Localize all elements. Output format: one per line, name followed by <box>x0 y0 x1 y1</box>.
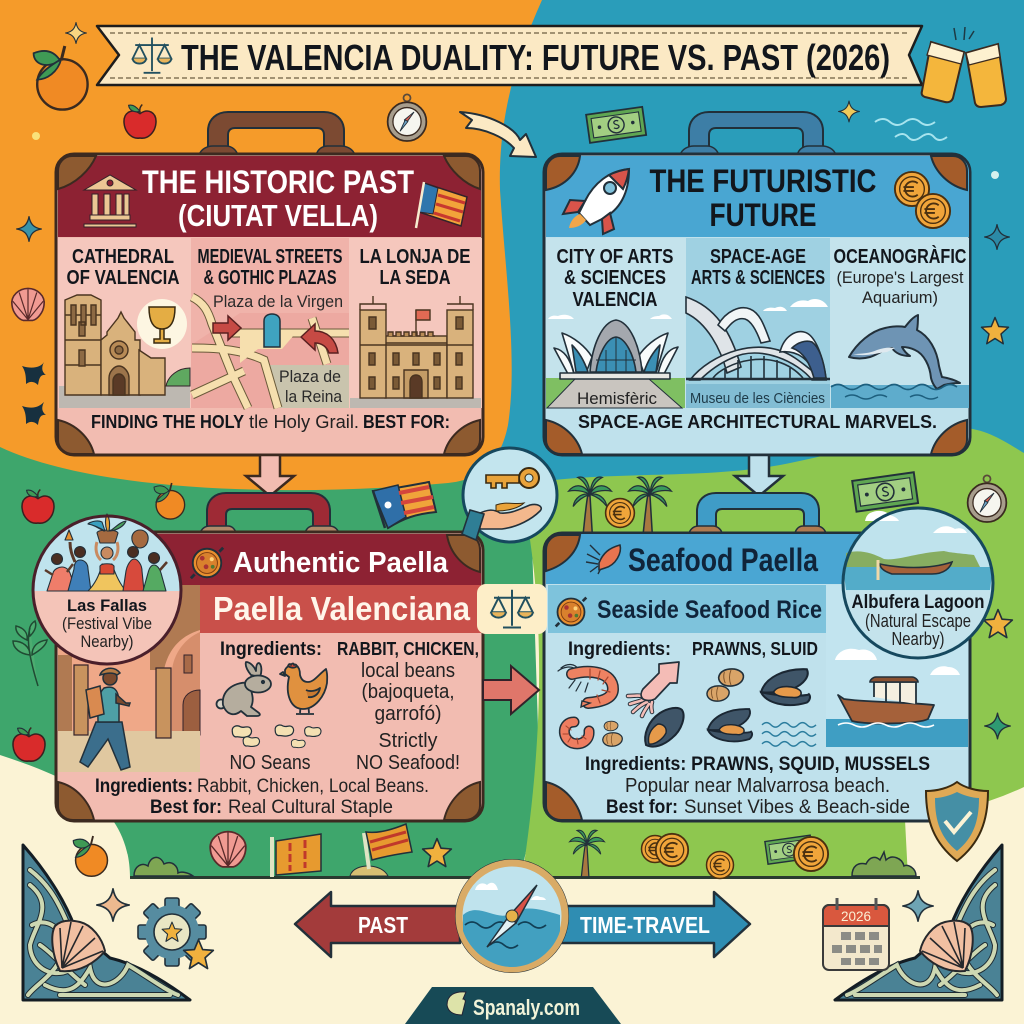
sub-heading bar <box>200 585 482 633</box>
column: medieval streets: Plaza de <box>279 367 341 386</box>
suitcase: authentic paella: Rabbit, Chicken, Local Beans. <box>197 776 429 797</box>
decorative icons: middle <box>13 472 1012 761</box>
image: wooden boat <box>826 585 968 750</box>
ingredients block: garrofó) <box>374 703 442 725</box>
icon: Valencian flag <box>373 482 436 528</box>
decorative icons: lower strip <box>73 782 988 878</box>
ingredients block: RABBIT, CHICKEN, <box>337 639 479 659</box>
decorative icons: upper right <box>586 27 1009 344</box>
column: space-age <box>686 246 830 408</box>
cathedral drawing <box>65 295 165 395</box>
suitcase handle <box>689 112 823 155</box>
header bar <box>546 156 969 237</box>
icon: greek temple <box>84 175 136 227</box>
header bar <box>546 534 969 584</box>
circle: las fallas: (Festival Vibe <box>62 614 152 633</box>
column: oceanografic: OCEANOGRÀFIC <box>834 245 966 268</box>
suitcase: seafood paella: Seaside Seafood Rice <box>597 596 822 624</box>
icon: rocket <box>563 169 629 234</box>
icon: gear <box>138 898 206 966</box>
suitcase: the futuristic future: FUTURE <box>710 197 816 233</box>
suitcase: authentic paella: Paella Valenciana <box>213 590 471 627</box>
curved arrow between past and future suitcases <box>460 112 536 157</box>
icon: beans <box>232 726 251 737</box>
suitcase: the historic past: BEST FOR: <box>363 411 450 432</box>
icon: paella pan <box>556 598 586 626</box>
corner ornament: right <box>835 845 1002 1000</box>
sub-heading bar <box>548 585 826 633</box>
column: la lonja de la seda: LA SEDA <box>380 267 450 289</box>
heading: Seafood Paella <box>628 542 818 578</box>
arrow: past: PAST <box>358 912 408 938</box>
festival figures <box>45 514 167 591</box>
arrow: future suitcase down to seafood paella <box>735 455 783 496</box>
column: cathedral: CATHEDRAL <box>72 246 174 268</box>
box: balance scales <box>477 584 547 634</box>
ingredients block: Ingredients: <box>220 639 322 660</box>
header bar <box>58 156 481 237</box>
icon: mussels <box>761 669 810 705</box>
suitcase: seafood paella: Best for: <box>606 797 678 818</box>
column: oceanografic: (Europe's Largest <box>836 268 964 287</box>
icon: holy grail <box>137 299 187 349</box>
icon: scales of justice <box>133 38 171 73</box>
compass emblem <box>456 860 568 972</box>
column: cathedral: OF VALENCIA <box>66 267 180 289</box>
footer text: FINDING THE HOLY <box>91 411 245 432</box>
column: city of arts: & SCIENCES <box>564 267 666 289</box>
column: medieval streets: la Reina <box>285 387 342 406</box>
header bar <box>58 534 481 585</box>
ingredients block: NO Seafood! <box>356 752 460 774</box>
icon: rabbit <box>216 662 271 716</box>
column: oceanografic <box>831 245 969 408</box>
column: medieval streets: MEDIEVAL STREETS <box>198 246 342 268</box>
waves <box>762 723 816 727</box>
icon: flag <box>416 182 467 228</box>
suitcase body <box>544 533 970 821</box>
suitcase: the futuristic future <box>544 112 970 455</box>
icon: prawn <box>558 664 613 707</box>
suitcase body <box>544 154 970 455</box>
ingredients block: local beans <box>361 660 455 682</box>
footer text: Ingredients: <box>95 776 193 797</box>
bottom left icons <box>97 889 213 969</box>
icon: calendar 2026: 2026 <box>841 908 871 924</box>
ingredients block: (bajoqueta, <box>362 681 454 703</box>
column: city of arts: CITY OF ARTS <box>556 246 674 268</box>
circle: albufera lagoon <box>843 508 994 658</box>
column panels <box>546 238 686 408</box>
suitcase: the historic past: tle Holy Grail. <box>249 411 359 432</box>
ingredients block <box>558 639 818 747</box>
arrow: time-travel: TIME-TRAVEL <box>580 912 710 938</box>
brass corners <box>58 535 480 820</box>
circle: albufera lagoon: Nearby) <box>892 629 944 649</box>
icon: clinking beer glasses <box>922 27 1006 107</box>
icon: shrimp <box>586 545 620 574</box>
column: cathedral <box>59 246 190 408</box>
column: medieval streets <box>191 246 349 408</box>
title banner <box>97 26 922 85</box>
ingredients block: PRAWNS, SLUID <box>692 639 818 659</box>
suitcase body <box>56 532 483 821</box>
circle: las fallas <box>33 514 181 664</box>
column: space-age: SPACE-AGE <box>710 246 806 268</box>
arrow: past suitcase down to paella <box>246 455 294 496</box>
brass corners <box>546 156 967 454</box>
footer text: Ingredients: PRAWNS, SQUID, MUSSELS <box>585 754 930 775</box>
column: la lonja de la seda: LA LONJA DE <box>360 246 470 268</box>
footer text: SPACE-AGE ARCHITECTURAL MARVELS. <box>578 411 937 432</box>
icon: dolphin <box>849 315 960 389</box>
arrow: past <box>295 892 460 957</box>
circle: las fallas: Nearby) <box>80 632 134 651</box>
ingredients block <box>216 639 479 774</box>
icon: paella pan <box>191 548 223 578</box>
suitcase body <box>56 154 483 455</box>
suitcase: seafood paella <box>544 493 970 821</box>
circle: albufera lagoon: (Natural Escape <box>865 611 971 631</box>
ingredients block: Ingredients: <box>568 639 671 660</box>
column: oceanografic: Aquarium) <box>862 288 938 307</box>
corner ornament: left <box>23 845 190 1000</box>
icon: squid <box>628 662 679 716</box>
suitcase handle <box>207 493 330 533</box>
column: city of arts: VALENCIA <box>572 289 658 311</box>
heading: THE HISTORIC PAST <box>142 164 414 200</box>
icon: closed mussel <box>645 708 684 747</box>
column: space-age: Museu de les Ciències <box>690 391 825 407</box>
column: medieval streets: Plaza de la Virgen <box>213 292 343 311</box>
arrow: time-travel <box>555 892 750 957</box>
connector arrow: paella to seafood <box>483 666 539 714</box>
column: city of arts: Hemisfèric <box>577 389 657 408</box>
column: medieval streets: & GOTHIC PLAZAS <box>204 267 336 289</box>
brass corners <box>58 156 480 454</box>
column: la lonja de la seda <box>350 246 481 408</box>
ingredients block: Strictly <box>378 730 438 752</box>
Hemisferic building <box>554 320 678 379</box>
footer brand badge: Spanaly.com <box>473 995 580 1020</box>
icon: flag on mound <box>350 824 412 876</box>
suitcase: seafood paella: Sunset Vibes & Beach-side <box>684 797 910 818</box>
ingredients block: NO Seans <box>230 752 310 774</box>
walker figure <box>80 668 130 770</box>
label: Las Fallas <box>67 596 147 615</box>
column: city of arts <box>546 246 685 408</box>
Museu de les Ciencies arches <box>686 297 830 380</box>
suitcase: authentic paella <box>56 493 483 821</box>
circle: key in hand <box>462 448 557 542</box>
icon: clams <box>604 721 618 731</box>
suitcase: authentic paella: Real Cultural Staple <box>228 797 393 818</box>
icon: flag on pole <box>272 834 321 877</box>
icon: curled prawn <box>563 722 589 744</box>
suitcase: authentic paella: Best for: <box>150 797 222 818</box>
image: walker under arches <box>58 585 200 772</box>
timeline: past to time-travel <box>295 860 750 972</box>
suitcase: seafood paella: Popular near Malvarrosa beach. <box>625 775 890 797</box>
street map <box>191 297 349 408</box>
suitcase handle <box>697 493 819 533</box>
icon: chicken <box>280 664 327 714</box>
bottom right icons <box>823 891 933 970</box>
suitcase: the historic past: (CIUTAT VELLA) <box>178 198 378 233</box>
suitcase handle <box>208 112 344 155</box>
column panels <box>58 238 191 408</box>
suitcase: the historic past <box>56 112 483 455</box>
brass corners <box>546 535 582 820</box>
column: space-age: ARTS & SCIENCES <box>691 267 825 289</box>
footer brand badge <box>405 987 621 1024</box>
castle drawing <box>360 296 473 398</box>
icon: shield with check <box>926 782 988 861</box>
decorative icons: upper left <box>12 23 426 425</box>
heading: THE FUTURISTIC <box>650 163 876 199</box>
icon: coins <box>895 172 929 206</box>
icon: brand mark <box>447 992 466 1015</box>
label: Albufera Lagoon <box>852 592 984 613</box>
heading: Authentic Paella <box>233 547 449 579</box>
